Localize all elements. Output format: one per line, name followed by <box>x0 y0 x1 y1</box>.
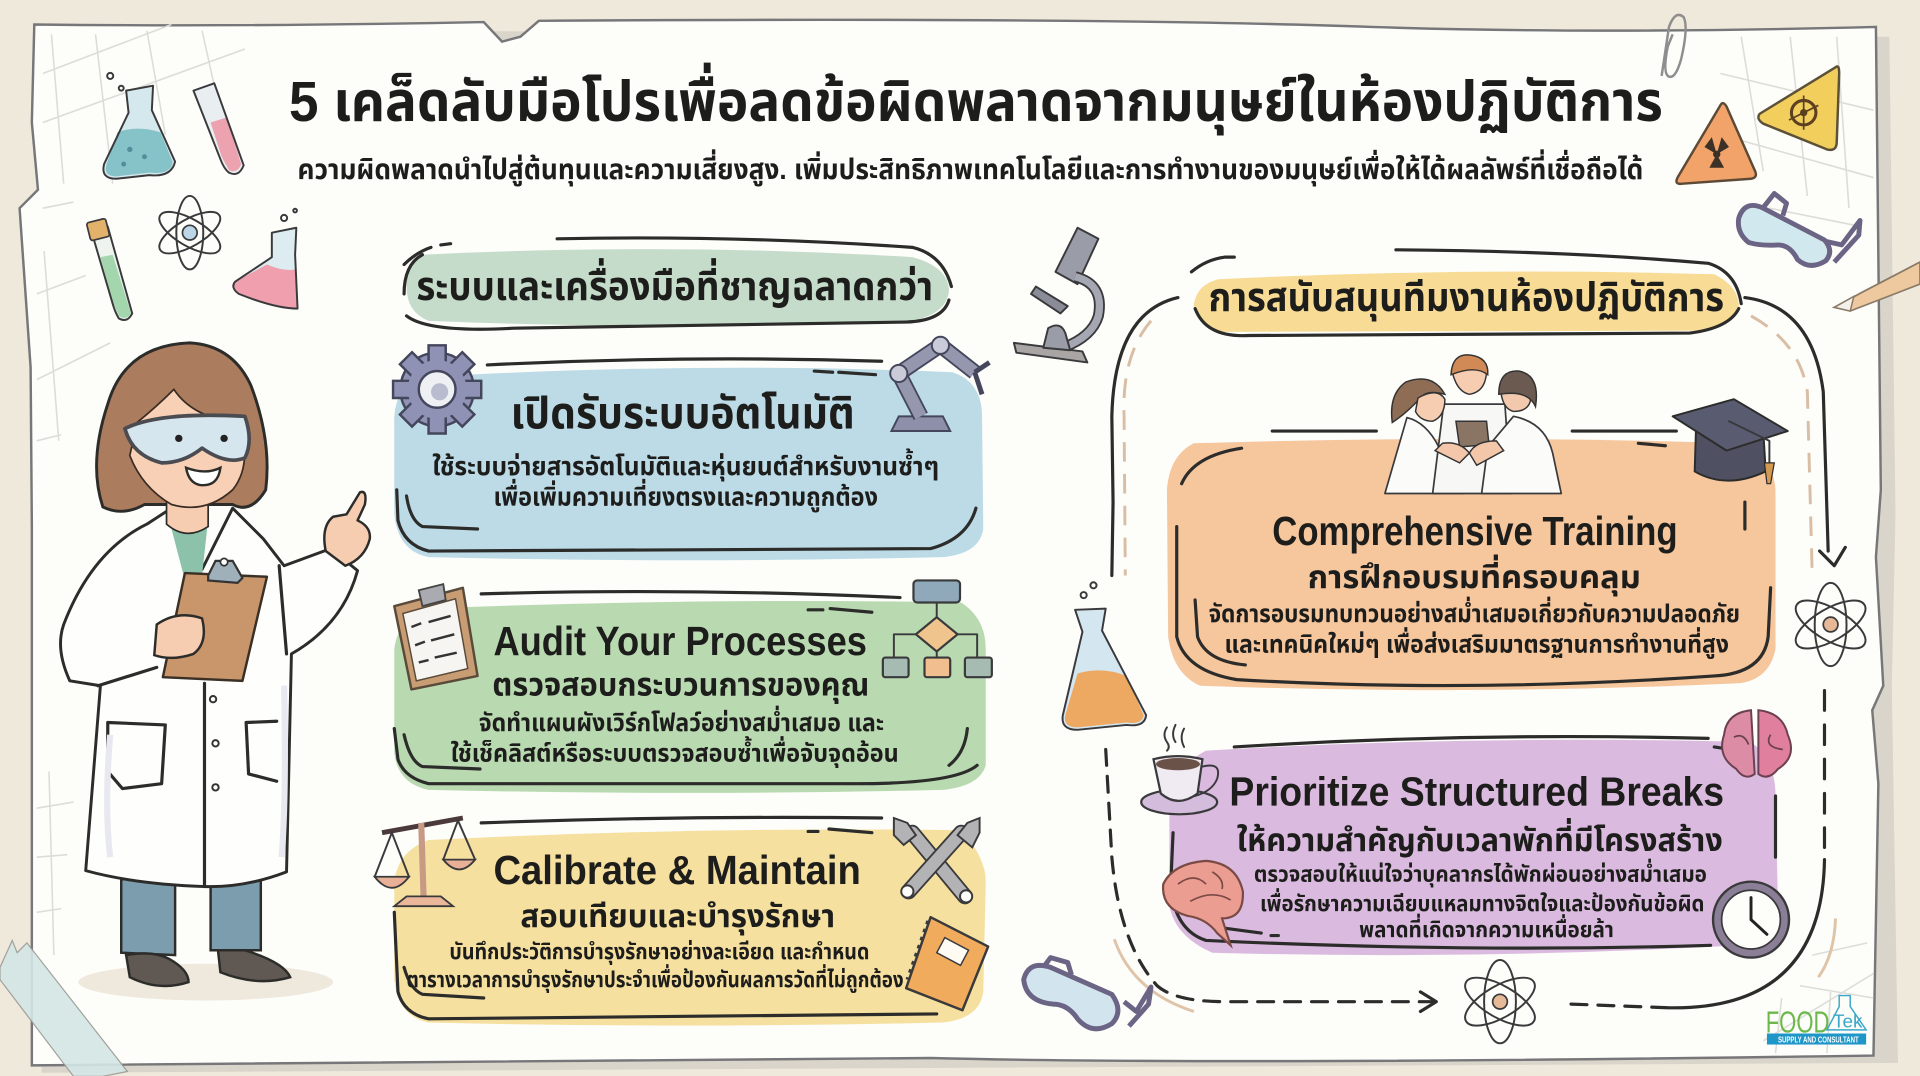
card description <box>451 705 899 769</box>
icon: paperclip <box>1662 15 1686 77</box>
character: scientist <box>61 343 370 1000</box>
card description: และเทคนิคใหม่ๆ เพื่อส่งเสริมมาตรฐานการทำงานที่สูง <box>1224 627 1729 660</box>
card description: เพื่อรักษาความเฉียบแหลมทางจิตใจและป้องกันข้อผิด <box>1260 888 1704 916</box>
pointing hand <box>324 492 370 566</box>
card description: พลาดที่เกิดจากความเหนื่อยล้า <box>1359 914 1614 942</box>
icon: radiation warning triangle <box>1676 103 1756 184</box>
panel: audit your processes <box>394 580 992 793</box>
icon: gear <box>393 345 481 433</box>
card heading: Comprehensive Training <box>1272 508 1678 554</box>
panel: calibrate and maintain <box>375 817 988 1026</box>
face <box>130 389 245 507</box>
coat details <box>98 566 287 887</box>
icon: microscope <box>1014 228 1099 362</box>
subtitle: ความผิดพลาดนำไปสู่ต้นทุนและความเสี่ยงสูง. เพิ่มประสิทธิภาพเทคโนโลยีและการทำงานของมนุษย์เพื่อให้ได้ผลลัพธ์ที่เชื่อถือได้ <box>298 149 1643 187</box>
panel: embrace automation <box>393 337 989 560</box>
smile <box>186 468 220 485</box>
teal shirt <box>169 519 208 576</box>
section heading: smarter systems and tools <box>404 238 951 329</box>
card description: ใช้ระบบจ่ายสารอัตโนมัติและหุ่นยนต์สำหรับงานซ้ำๆ <box>432 448 939 482</box>
icon: safety goggles bottom <box>1024 958 1151 1029</box>
lab coat <box>61 508 358 887</box>
logo: FoodTek: SUPPLY AND CONSULTANT <box>1778 1036 1859 1045</box>
card description: ตารางเวลาการบำรุงรักษาประจำเพื่อป้องกันผลการวัดที่ไม่ถูกต้อง <box>407 964 904 993</box>
card description <box>1209 596 1740 660</box>
icon: crossed wrenches <box>894 818 980 902</box>
panel: comprehensive training <box>1167 355 1788 690</box>
card description <box>407 939 904 993</box>
card heading: Prioritize Structured Breaks <box>1229 769 1724 815</box>
card description <box>1254 859 1707 942</box>
panel: prioritize structured breaks <box>1141 710 1791 958</box>
dashed loop arrow around team panels <box>1106 298 1845 1011</box>
card description: ใช้เช็คลิสต์หรือระบบตรวจสอบซ้ำเพื่อจับจุดอ้อน <box>451 736 899 769</box>
card subheading: ตรวจสอบกระบวนการของคุณ <box>492 667 869 704</box>
icon: notebook <box>906 917 988 1010</box>
section heading: laboratory team support <box>1191 250 1741 336</box>
icon: team of scientists <box>1385 355 1561 493</box>
card heading: เปิดรับระบบอัตโนมัติ <box>511 390 855 439</box>
card description: เพื่อเพิ่มความเที่ยงตรงและความถูกต้อง <box>493 479 878 513</box>
icon: graduation cap <box>1673 399 1788 484</box>
shoes <box>126 950 290 986</box>
goggles <box>125 415 249 463</box>
card subheading: สอบเทียบและบำรุงรักษา <box>520 898 835 935</box>
icon: safety goggles top right <box>1738 193 1860 265</box>
icon: pink test tube <box>193 83 244 174</box>
icon: biohazard warning triangle <box>1758 66 1839 150</box>
icon: atom right <box>1789 583 1873 666</box>
icon: robot arm <box>890 337 989 431</box>
icon: atom top left <box>153 196 226 269</box>
logo: FoodTek: Tek <box>1833 1010 1863 1031</box>
decorative tape bottom left <box>0 940 127 1076</box>
card description: บันทึกประวัติการบำรุงรักษาอย่างละเอียด และกำหนด <box>449 939 869 965</box>
icon: green test tube <box>86 218 132 320</box>
icon: coffee cup with steam <box>1141 725 1218 814</box>
icon: brain top right <box>1722 710 1791 777</box>
section heading: smarter systems and tools: ระบบและเครื่องมือที่ชาญฉลาดกว่า <box>416 258 933 309</box>
section heading: laboratory team support: การสนับสนุนทีมงานห้องปฏิบัติการ <box>1209 274 1724 322</box>
icon: pencil <box>1834 262 1920 311</box>
card subheading: ให้ความสำคัญกับเวลาพักที่มีโครงสร้าง <box>1237 818 1723 858</box>
card heading: Audit Your Processes <box>493 618 867 664</box>
icon: teal flask <box>103 73 175 179</box>
card description <box>432 448 939 513</box>
hair back <box>97 343 267 511</box>
icon: flask with orange liquid <box>1063 582 1146 730</box>
title: 5 เคล็ดลับมือโปรเพื่อลดข้อผิดพลาดจากมนุษย์ในห้องปฏิบัติการ <box>289 62 1663 136</box>
pants <box>121 879 261 955</box>
neck <box>167 492 208 533</box>
icon: brain lower left <box>1163 861 1243 945</box>
card subheading: การฝึกอบรมที่ครอบคลุม <box>1308 555 1641 596</box>
card description: ตรวจสอบให้แน่ใจว่าบุคลากรได้พักผ่อนอย่างสม่ำเสมอ <box>1254 859 1707 888</box>
logo: FoodTek <box>1766 996 1866 1045</box>
icon: flowchart <box>883 580 992 677</box>
icon: pink flask <box>233 209 298 309</box>
card heading: Calibrate & Maintain <box>493 847 861 893</box>
logo: FoodTek: FOOD <box>1766 1005 1829 1039</box>
hand on clipboard <box>154 615 204 658</box>
card description: จัดทำแผนผังเวิร์กโฟลว์อย่างสม่ำเสมอ และ <box>479 705 884 737</box>
icon: balance scale <box>375 818 475 906</box>
icon: clipboard checklist <box>394 584 478 689</box>
ground shadow <box>78 964 333 1000</box>
icon: clock <box>1713 882 1789 958</box>
icon: atom bottom <box>1458 960 1542 1043</box>
clipboard <box>163 558 267 681</box>
card description: จัดการอบรมทบทวนอย่างสม่ำเสมอเกี่ยวกับความปลอดภัย <box>1209 596 1740 628</box>
